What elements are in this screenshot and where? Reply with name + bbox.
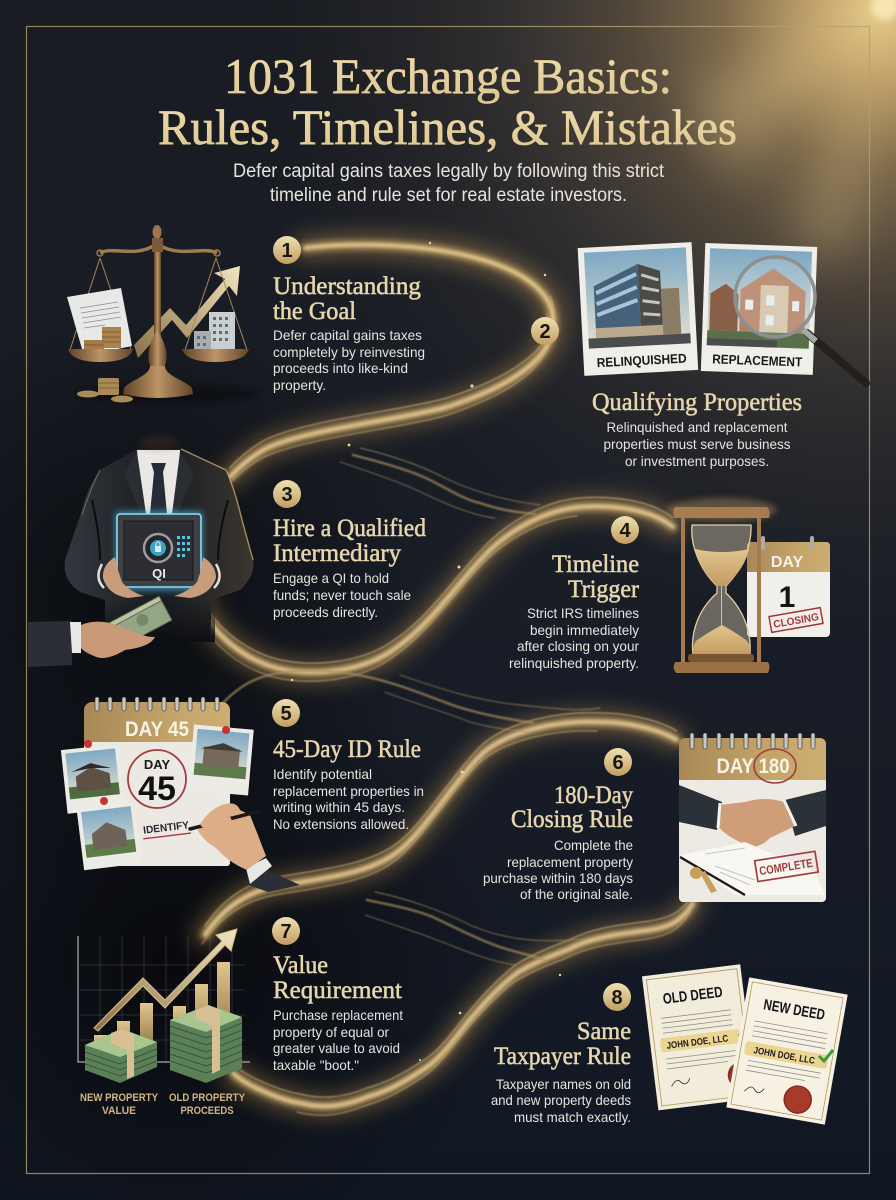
number badge 4 xyxy=(611,516,639,544)
chart labels: VALUE xyxy=(102,1105,136,1117)
number badge 5 xyxy=(272,699,300,727)
chart labels: OLD PROPERTY xyxy=(169,1092,246,1104)
icon: property photos with magnifier: RELINQUISHED xyxy=(596,351,687,370)
heading xyxy=(273,952,402,1004)
icon: day 180 calendar with handshake and complete stamp: COMPLETE xyxy=(758,856,814,878)
body text: No extensions allowed. xyxy=(273,816,409,832)
body text: properties must serve business xyxy=(604,436,790,452)
icon: day 45 calendar with property photos and hand writing: DAY xyxy=(144,757,170,772)
icon: old deed and new deed documents xyxy=(642,964,848,1125)
body text: of the original sale. xyxy=(520,886,633,902)
icon: day 180 calendar with handshake and complete stamp: DAY 180 xyxy=(716,755,790,778)
icon: hourglass and day 1 calendar: CLOSING xyxy=(772,611,820,631)
number badge 1: 1 xyxy=(281,240,293,262)
subtitle xyxy=(233,161,665,206)
golden flowing timeline path xyxy=(189,242,693,1115)
number badge 7 xyxy=(272,917,300,945)
body text xyxy=(604,419,790,469)
icon: old deed and new deed documents: NEW DEED xyxy=(762,996,826,1024)
icon: old deed and new deed documents: JOHN DOE, LLC xyxy=(753,1045,816,1067)
number badge 5: 5 xyxy=(280,703,292,725)
subtitle: Defer capital gains taxes legally by following this strict xyxy=(233,161,665,182)
heading: Taxpayer Rule xyxy=(494,1043,631,1070)
number badge 3: 3 xyxy=(281,484,293,506)
title: 1031 Exchange Basics: xyxy=(224,48,672,104)
body text: and new property deeds xyxy=(491,1092,631,1108)
icon: rising chart with cash stacks xyxy=(78,929,250,1117)
body text: funds; never touch sale xyxy=(273,587,411,603)
heading: 45-Day ID Rule xyxy=(273,736,421,763)
icon: day 45 calendar with property photos and hand writing: 45 xyxy=(138,770,176,808)
icon: property photos with magnifier: REPLACEMENT xyxy=(712,351,803,370)
body text xyxy=(483,837,633,902)
number badge 6: 6 xyxy=(612,752,624,774)
body text: Taxpayer names on old xyxy=(496,1076,631,1092)
panel: step 7 value requirement xyxy=(78,917,403,1117)
heading: Trigger xyxy=(568,576,640,603)
body text: Purchase replacement xyxy=(273,1007,403,1023)
subtitle: timeline and rule set for real estate investors. xyxy=(270,185,627,206)
panel: step 6 180-day closing rule xyxy=(483,733,826,902)
icon: property photos with magnifier xyxy=(578,242,866,383)
body text xyxy=(273,1007,403,1073)
icon: hourglass and day 1 calendar: DAY xyxy=(771,554,803,571)
icon: hand passing cash xyxy=(28,596,172,667)
body text: proceeds into like-kind xyxy=(273,360,408,376)
panel: step 2 qualifying properties xyxy=(531,242,866,469)
icon: hourglass and day 1 calendar: 1 xyxy=(779,581,795,614)
chart labels xyxy=(80,1092,246,1117)
title xyxy=(158,48,737,155)
body text: after closing on your xyxy=(517,638,639,654)
body text: proceeds directly. xyxy=(273,604,378,620)
body text: greater value to avoid xyxy=(273,1040,400,1056)
icon: old deed and new deed documents: OLD DEED xyxy=(662,984,724,1008)
title: Rules, Timelines, & Mistakes xyxy=(158,99,737,155)
body text: begin immediately xyxy=(530,622,639,638)
number badge 3 xyxy=(273,480,301,508)
body text: replacement property xyxy=(507,854,633,870)
panel: step 8 same taxpayer rule xyxy=(491,964,848,1125)
body text: relinquished property. xyxy=(509,655,639,671)
icon: day 45 calendar with property photos and hand writing: DAY 45 xyxy=(125,718,189,741)
body text: property of equal or xyxy=(273,1024,389,1040)
heading: Qualifying Properties xyxy=(592,389,802,416)
heading: Requirement xyxy=(273,977,402,1004)
icon: balance scale with document, coins, building and arrow xyxy=(67,225,260,403)
body text: purchase within 180 days xyxy=(483,870,633,886)
heading xyxy=(511,782,633,833)
number badge 6 xyxy=(604,748,632,776)
icon: day 45 calendar with property photos and hand writing xyxy=(61,697,300,892)
icon: old deed and new deed documents: JOHN DOE, LLC xyxy=(666,1033,729,1052)
body text: property. xyxy=(273,377,326,393)
heading xyxy=(552,551,640,603)
chart labels: NEW PROPERTY xyxy=(80,1092,159,1104)
body text: replacement properties in xyxy=(273,783,424,799)
body text: Complete the xyxy=(554,837,633,853)
secondary crossing bands xyxy=(223,448,600,965)
panel: step 4 timeline trigger xyxy=(509,498,830,673)
heading: Closing Rule xyxy=(511,806,633,833)
heading xyxy=(273,273,421,325)
body text xyxy=(273,570,411,620)
panel: step 3 hire a qualified intermediary xyxy=(28,436,426,667)
heading: the Goal xyxy=(273,298,356,325)
panel: step 1 understanding the goal xyxy=(67,225,425,403)
number badge 7: 7 xyxy=(280,921,292,943)
body text xyxy=(273,327,425,393)
number badge 2: 2 xyxy=(539,321,551,343)
heading xyxy=(494,1018,631,1070)
panel: step 5 45-day id rule xyxy=(61,697,424,892)
body text: completely by reinvesting xyxy=(273,344,425,360)
body text: Identify potential xyxy=(273,766,372,782)
icon: suited intermediary holding glowing safe xyxy=(28,436,253,667)
heading: Value xyxy=(273,952,328,979)
heading: Hire a Qualified xyxy=(273,515,426,542)
heading xyxy=(273,515,426,567)
body text: writing within 45 days. xyxy=(272,799,405,815)
icon: suited intermediary holding glowing safe: QI xyxy=(152,566,166,581)
number badge 2 xyxy=(531,317,559,345)
body text: Engage a QI to hold xyxy=(273,570,389,586)
number badge 8 xyxy=(603,983,631,1011)
number badge 4: 4 xyxy=(619,520,631,542)
number badge 8: 8 xyxy=(611,987,623,1009)
body text xyxy=(509,605,639,671)
heading: Timeline xyxy=(552,551,639,578)
heading: Understanding xyxy=(273,273,421,300)
heading: Intermediary xyxy=(273,540,401,567)
body text: Relinquished and replacement xyxy=(606,419,788,435)
number badge 1 xyxy=(273,236,301,264)
icon: day 45 calendar with property photos and hand writing: IDENTIFY xyxy=(143,819,190,837)
body text xyxy=(272,766,424,832)
icon: day 180 calendar with handshake and complete stamp xyxy=(679,733,826,902)
body text: must match exactly. xyxy=(514,1109,631,1125)
heading: 180-Day xyxy=(554,782,633,809)
body text: Strict IRS timelines xyxy=(527,605,639,621)
body text: Defer capital gains taxes xyxy=(273,327,422,343)
chart labels: PROCEEDS xyxy=(180,1105,234,1117)
icon: hourglass and day 1 calendar xyxy=(667,498,830,673)
heading: Same xyxy=(577,1018,631,1045)
body text xyxy=(491,1076,631,1125)
body text: or investment purposes. xyxy=(625,453,769,469)
body text: taxable "boot." xyxy=(273,1057,359,1073)
